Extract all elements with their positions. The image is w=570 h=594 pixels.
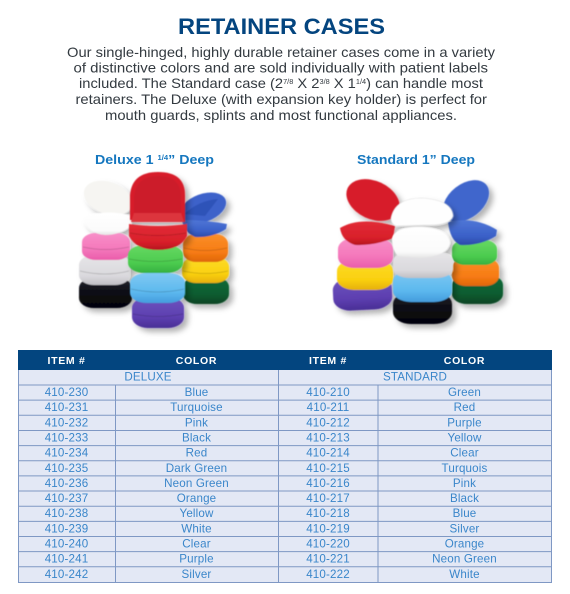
table header bar <box>18 350 552 370</box>
table: retainer case item numbers and colors <box>18 350 552 583</box>
deluxe rows: Clear <box>182 538 211 550</box>
deluxe rows: Purple <box>179 553 214 566</box>
deluxe rows: 410-236 <box>45 477 88 490</box>
deluxe rows: 410-233 <box>45 432 88 444</box>
standard rows: 410-215 <box>306 462 350 475</box>
header labels <box>47 355 485 367</box>
heading: deluxe: ” Deep <box>168 152 214 167</box>
standard rows: Blue <box>453 507 476 520</box>
deluxe rows: Silver <box>182 568 211 581</box>
header labels: ITEM # <box>309 355 347 367</box>
standard rows: 410-217 <box>306 492 350 505</box>
left stack <box>332 171 406 311</box>
standard rows: Orange <box>445 538 484 550</box>
deluxe rows: Orange <box>177 492 216 505</box>
deluxe rows <box>45 386 229 581</box>
standard rows: 410-214 <box>306 447 350 460</box>
intro paragraph: Our single-hinged, highly durable retainer cases come in a variety <box>67 44 495 60</box>
standard rows: 410-212 <box>306 416 350 429</box>
table grid <box>18 370 552 583</box>
intro paragraph: retainers. The Deluxe (with expansion key holder) is perfect for <box>76 91 487 107</box>
standard rows: 410-222 <box>306 568 350 581</box>
intro paragraph: X 1 <box>330 75 356 91</box>
header labels: ITEM # <box>47 355 86 367</box>
standard rows: 410-213 <box>306 432 350 444</box>
intro paragraph: included. The Standard case (2 <box>79 75 273 91</box>
deluxe rows: 410-231 <box>45 401 88 414</box>
intro paragraph: ) can handle most <box>366 75 483 91</box>
intro paragraph: mouth guards, splints and most functional appliances. <box>105 107 457 123</box>
section labels: STANDARD <box>383 370 447 384</box>
deluxe rows: 410-242 <box>45 568 88 581</box>
standard rows: White <box>449 568 480 581</box>
deluxe rows: 410-230 <box>45 386 88 399</box>
deluxe rows: 410-241 <box>45 553 88 566</box>
standard rows: Black <box>450 492 479 505</box>
standard rows: Clear <box>450 447 479 460</box>
standard rows: 410-211 <box>307 401 349 414</box>
heading: deluxe: 1/4 <box>157 155 168 162</box>
deluxe rows: Dark Green <box>166 462 227 475</box>
standard rows: Neon Green <box>432 553 497 566</box>
standard rows: 410-221 <box>306 553 350 566</box>
deluxe rows: 410-234 <box>45 447 89 460</box>
right stack <box>176 187 230 304</box>
standard rows: Silver <box>450 522 479 535</box>
deluxe rows: 410-239 <box>45 522 88 535</box>
photo: standard retainer cases <box>332 171 503 324</box>
section labels: DELUXE <box>124 370 172 384</box>
header labels: COLOR <box>444 355 485 367</box>
section labels <box>124 370 447 384</box>
intro paragraph: 3/8 <box>319 79 330 86</box>
standard rows <box>306 386 497 581</box>
deluxe rows: Blue <box>185 386 208 399</box>
standard rows: Pink <box>453 477 476 490</box>
intro paragraph: 1/4 <box>356 79 366 86</box>
deluxe rows: Neon Green <box>164 477 229 490</box>
left stack <box>79 174 137 308</box>
header labels: COLOR <box>176 355 217 367</box>
table background <box>18 350 552 583</box>
standard rows: 410-216 <box>306 477 350 490</box>
deluxe rows: Yellow <box>180 507 214 520</box>
heading: deluxe: Deluxe 1 <box>95 152 148 167</box>
standard rows: 410-220 <box>306 538 350 550</box>
intro paragraph: 7/8 <box>283 79 293 86</box>
standard rows: Yellow <box>448 432 482 444</box>
deluxe rows: 410-232 <box>45 416 88 429</box>
heading: standard: Standard 1” Deep <box>357 152 475 167</box>
deluxe rows: 410-240 <box>45 538 88 550</box>
deluxe rows: Black <box>182 432 211 444</box>
standard rows: Purple <box>447 416 482 429</box>
title: RETAINER CASES <box>178 14 385 39</box>
intro paragraph <box>67 44 495 123</box>
photo: deluxe retainer cases <box>79 172 230 328</box>
standard rows: 410-219 <box>306 522 350 535</box>
deluxe rows: Turquoise <box>170 401 223 414</box>
deluxe rows: 410-238 <box>45 507 88 520</box>
deluxe rows: Pink <box>185 416 208 429</box>
standard rows: 410-210 <box>306 386 350 399</box>
deluxe rows: White <box>181 522 212 535</box>
standard rows: Green <box>448 386 481 399</box>
centre stack <box>128 172 187 328</box>
deluxe rows: 410-235 <box>45 462 88 475</box>
intro paragraph: of distinctive colors and are sold individually with patient labels <box>74 60 488 76</box>
deluxe rows: Red <box>186 447 207 460</box>
standard rows: Turquois <box>442 462 487 475</box>
standard rows: Red <box>454 401 475 414</box>
standard rows: 410-218 <box>306 507 350 520</box>
intro paragraph: X 2 <box>293 75 320 91</box>
right stack <box>435 172 503 304</box>
deluxe rows: 410-237 <box>45 492 88 505</box>
centre stack <box>391 198 453 324</box>
